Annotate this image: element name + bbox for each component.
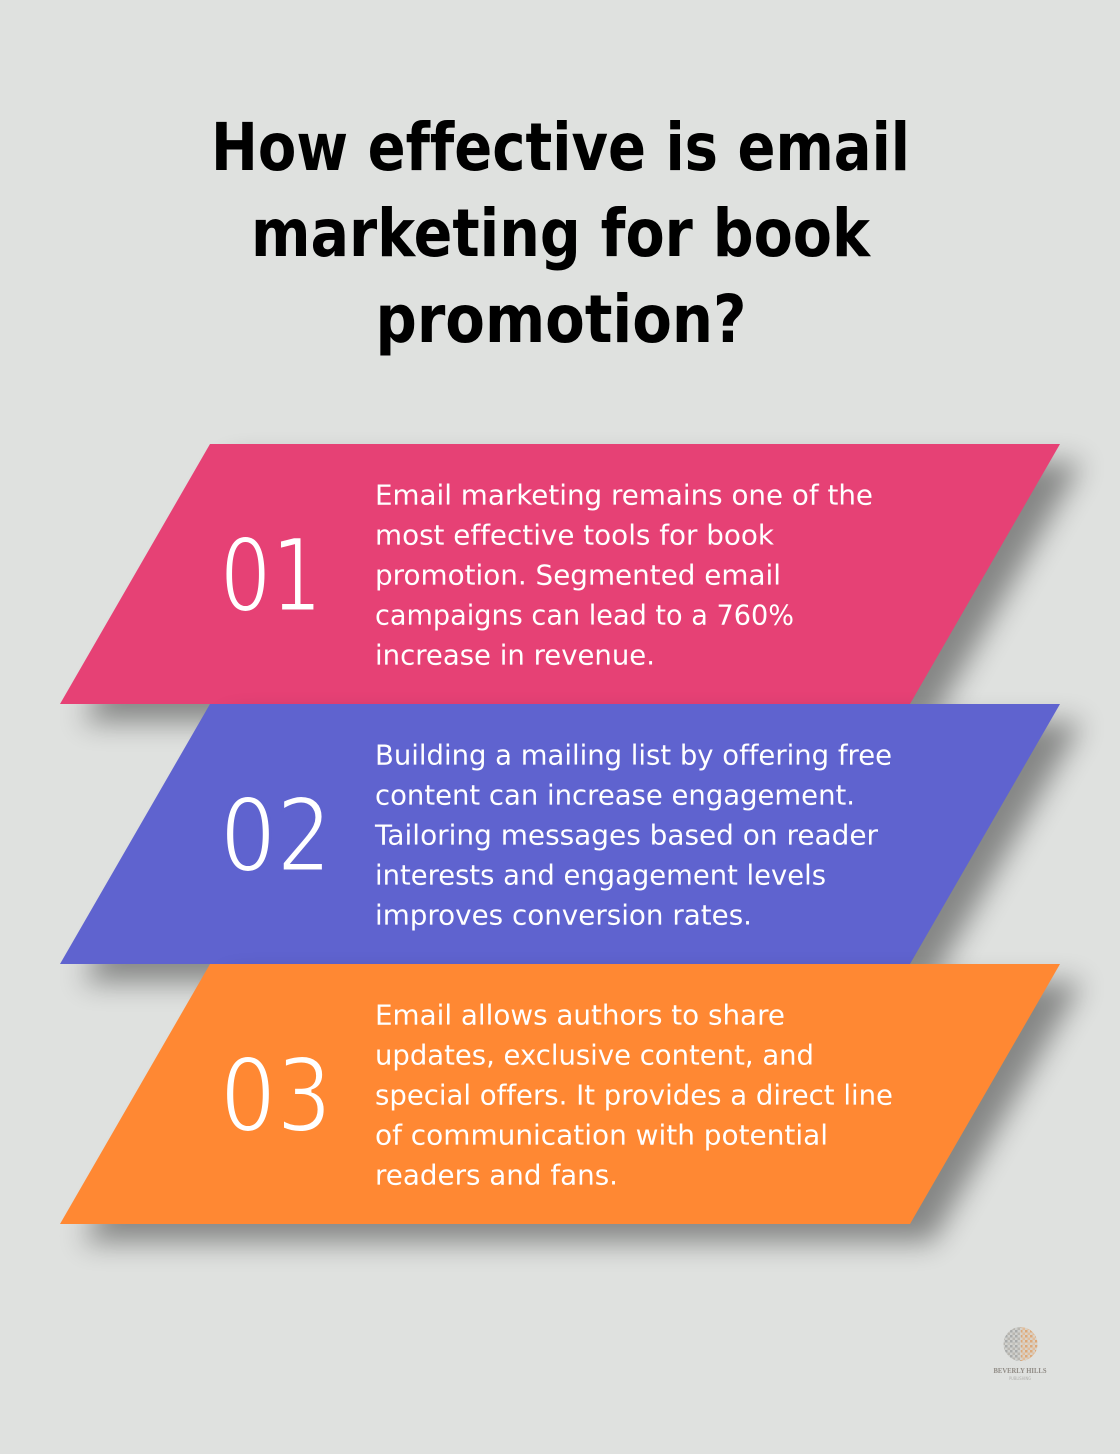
step 03 text: updates, exclusive content, and xyxy=(375,1038,814,1072)
title: promotion? xyxy=(376,281,746,358)
step 03 text: Email allows authors to share xyxy=(375,998,785,1032)
step 03 text: readers and fans. xyxy=(375,1158,618,1192)
step 03 text: of communication with potential xyxy=(375,1118,828,1152)
step 02 text xyxy=(374,738,892,932)
step 01 text: campaigns can lead to a 760% xyxy=(375,598,794,632)
title xyxy=(211,109,910,358)
step 01 text xyxy=(375,478,873,672)
step 02 text: Tailoring messages based on reader xyxy=(374,818,878,852)
step 01 text: promotion. Segmented email xyxy=(375,558,781,592)
panel: step 03 xyxy=(60,964,1082,1242)
step number 03: 03 xyxy=(220,1037,332,1156)
step 03 text: special offers. It provides a direct line xyxy=(375,1078,893,1112)
logo: Beverly Hills Publishing: PUBLISHING xyxy=(1009,1376,1031,1382)
step number 01: 01 xyxy=(220,517,322,636)
step 03 text xyxy=(375,998,893,1192)
panel: step 01 xyxy=(60,444,1082,722)
title: marketing for book xyxy=(251,195,872,272)
step 02 text: improves conversion rates. xyxy=(375,898,752,932)
step 01 text: increase in revenue. xyxy=(375,638,655,672)
step 02 text: Building a mailing list by offering free xyxy=(375,738,892,772)
step number 02: 02 xyxy=(220,777,332,896)
panel: step 02 xyxy=(60,704,1082,982)
logo: Beverly Hills Publishing: BEVERLY HILLS xyxy=(994,1367,1047,1375)
step 02 text: content can increase engagement. xyxy=(375,778,855,812)
step 02 text: interests and engagement levels xyxy=(375,858,826,892)
step 01 text: most effective tools for book xyxy=(375,518,775,552)
logo: Beverly Hills Publishing xyxy=(994,1327,1047,1382)
title: How effective is email xyxy=(211,109,910,186)
step 01 text: Email marketing remains one of the xyxy=(375,478,873,512)
